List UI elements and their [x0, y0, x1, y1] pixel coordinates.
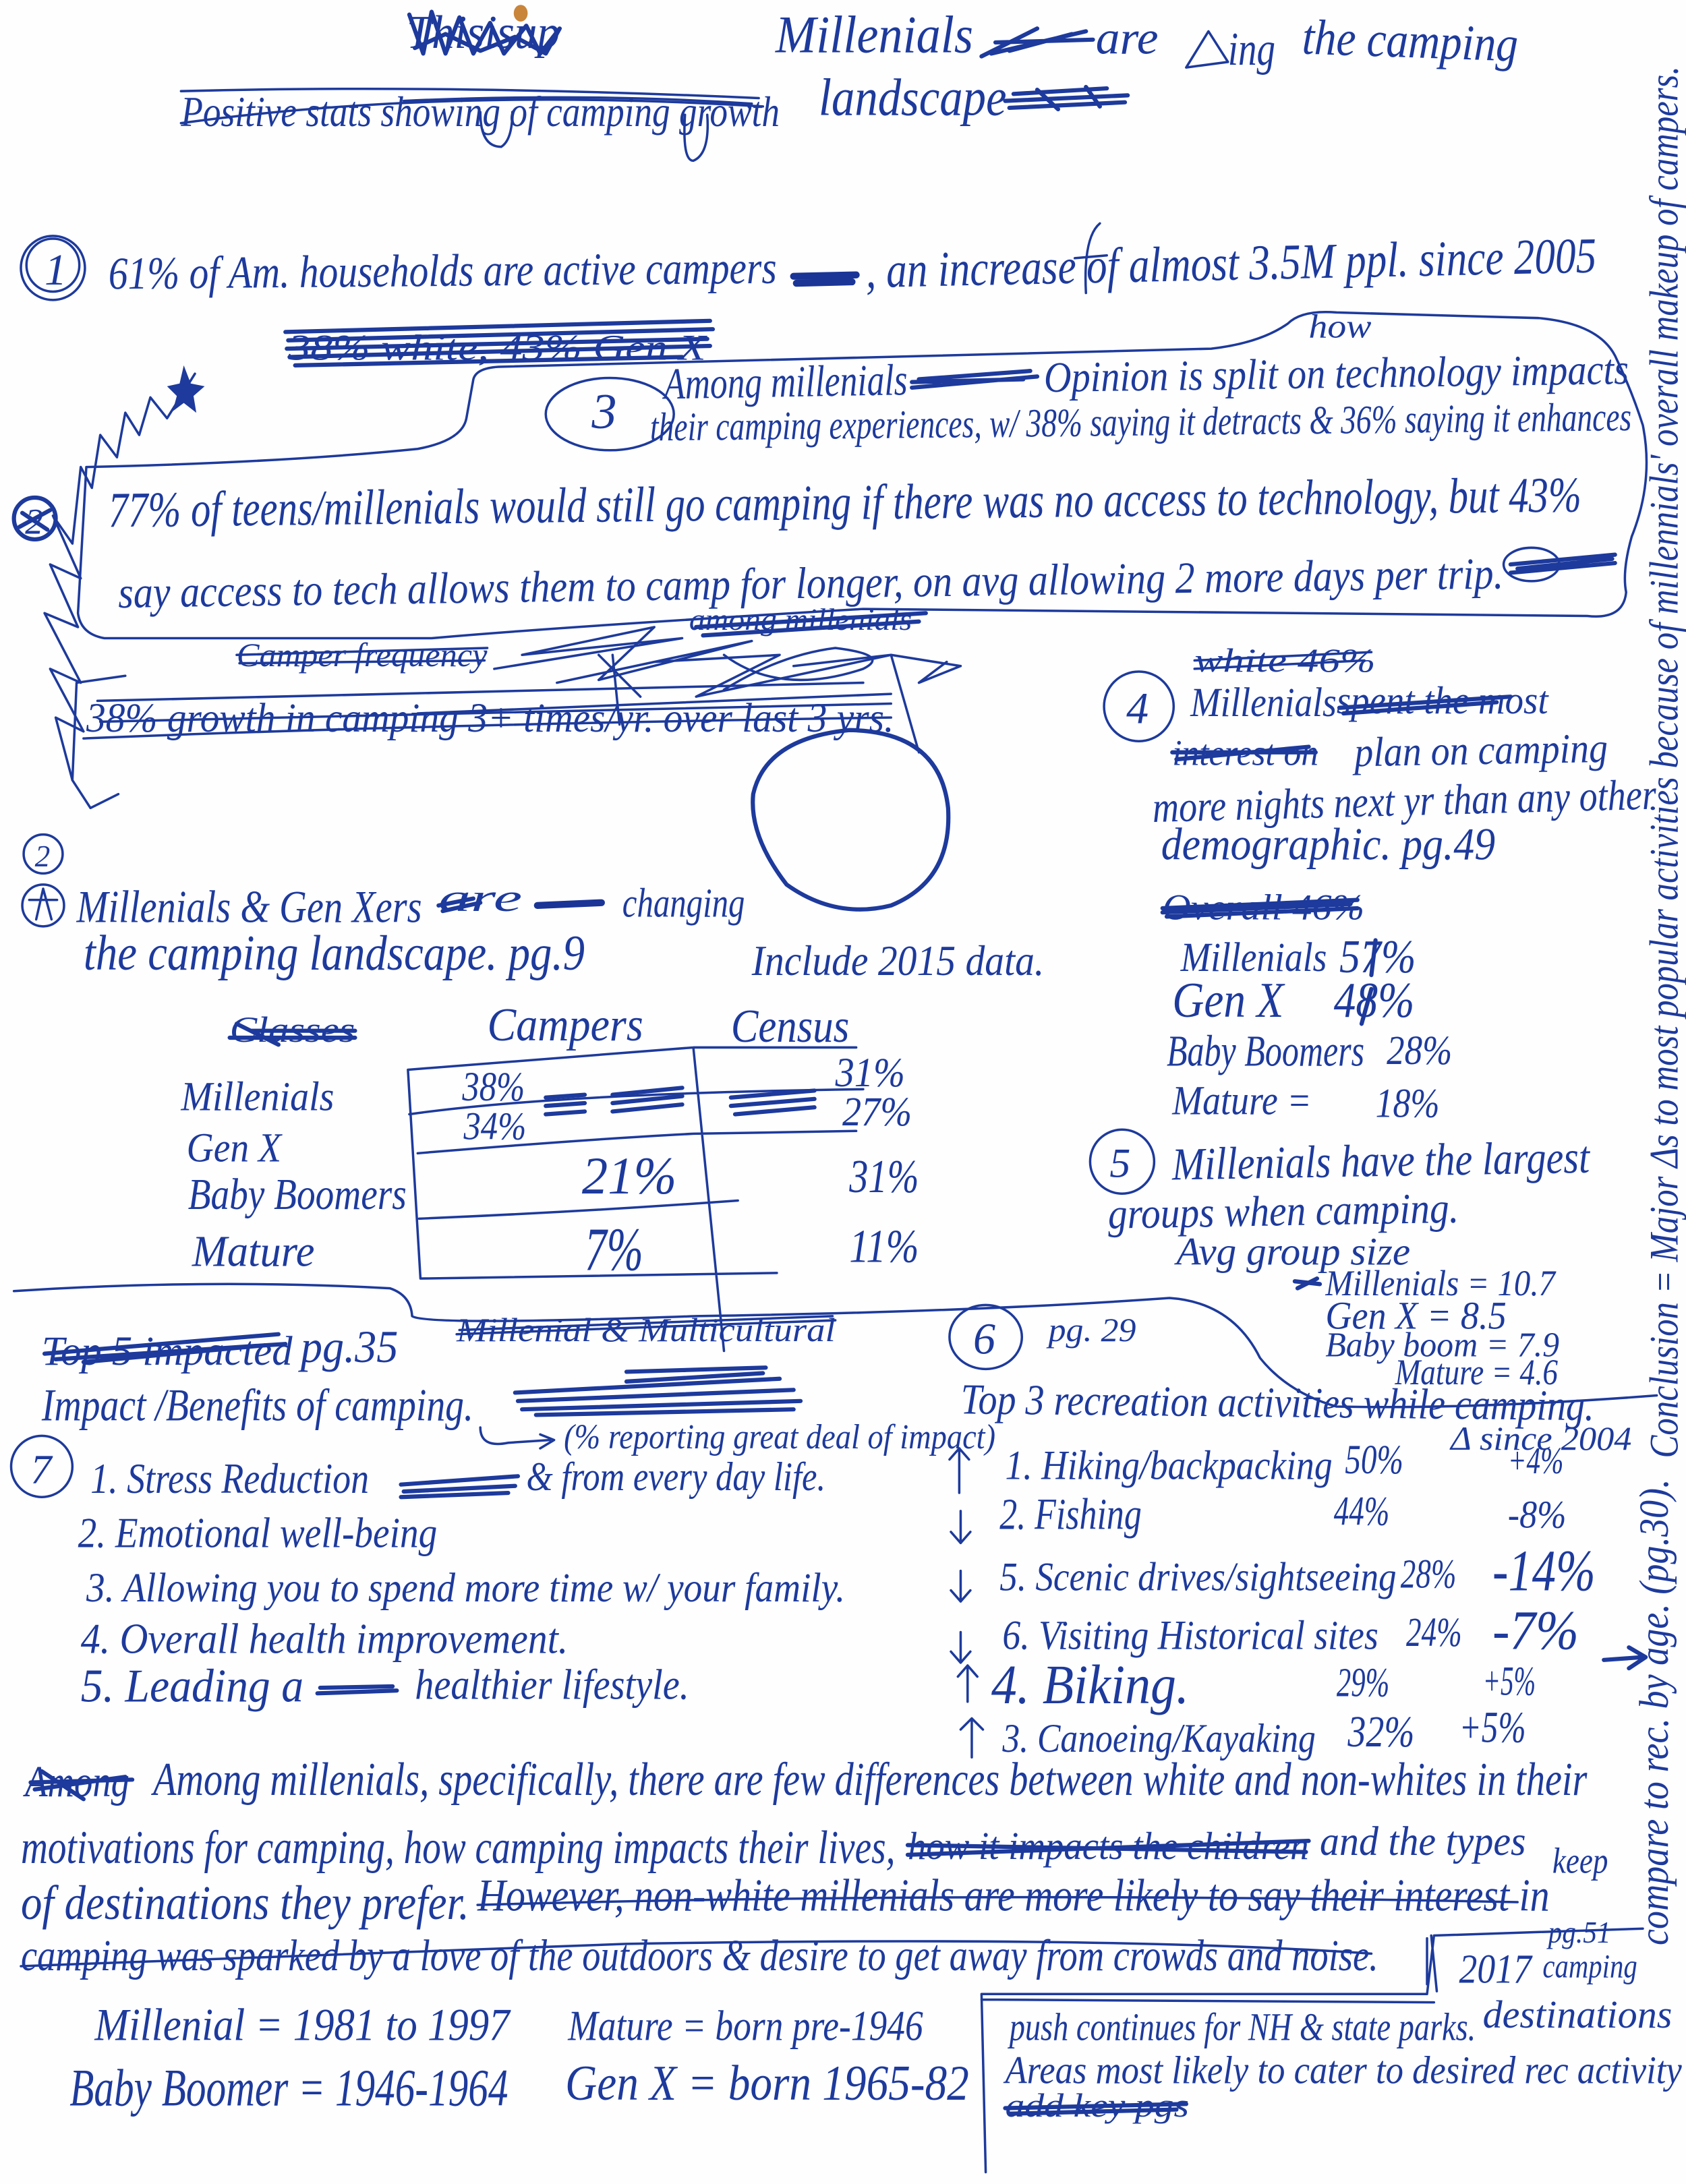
paragraph about millenials: Among — [23, 1757, 129, 1806]
scribbled section: camper frequency: 38% growth in camping 3+ times/yr. over last 3 yrs. — [86, 695, 894, 741]
coffee stain — [514, 5, 527, 22]
point 4: Millenials — [1190, 680, 1337, 726]
section heading: millenials and gen x: changing — [622, 880, 745, 926]
impact heading: Top 5 impacted — [42, 1328, 293, 1374]
table row labels: Millenials — [180, 1073, 334, 1119]
point 4: interest on — [1172, 732, 1318, 773]
paragraph about millenials — [21, 1753, 1608, 1980]
callout: 2017 camping destinations: destinations — [1483, 1993, 1672, 2036]
point 3 text — [650, 308, 1632, 449]
struck-out subtitle: Positive stats showing of camping growth — [181, 88, 780, 136]
point 5 — [1090, 1129, 1591, 1392]
recreation activities list: 6. Visiting Historical sites — [1002, 1612, 1378, 1658]
recreation activities list: 28% — [1401, 1551, 1456, 1597]
generation definitions: Millenial = 1981 to 1997 — [94, 1999, 511, 2050]
paragraph about millenials: motivations for camping, how camping impacts their lives, — [21, 1821, 895, 1874]
struck-out multicultural heading: Millenial & Multicultural — [456, 1311, 836, 1349]
paragraph about millenials: camping was sparked by a love of the outdoors & desire to get away from crowds and noise. — [21, 1931, 1378, 1980]
table values: 38% — [462, 1064, 525, 1110]
point 7: impact list: 3. Allowing you to spend more time w/ your family. — [86, 1565, 845, 1611]
scribbled-out line: 38% white, 43% Gen X — [287, 328, 707, 368]
struck-out subtitle — [181, 88, 780, 160]
title: the camping — [1302, 9, 1519, 73]
section heading: millenials and gen x: are — [438, 876, 522, 920]
stats: planning more nights: Millenials — [1180, 935, 1327, 980]
title: Millenials — [775, 5, 973, 63]
point 5: Millenials = 10.7 — [1325, 1263, 1557, 1303]
recreation activities list: Δ since 2004 — [1449, 1420, 1631, 1457]
scribbled section: camper frequency: among millenials — [689, 603, 912, 637]
scribbled-out line — [285, 321, 713, 368]
stats: planning more nights: Baby Boomers — [1167, 1026, 1364, 1075]
table headings — [230, 999, 849, 1053]
point 7: impact list: 4. Overall health improvement. — [81, 1614, 568, 1662]
table values: 27% — [842, 1089, 912, 1135]
recreation activities list: +5% — [1459, 1703, 1526, 1752]
section heading: millenials and gen x: Millenials & Gen Xers — [76, 881, 422, 933]
point 5: Millenials have the largest — [1171, 1131, 1591, 1190]
recreation activities list — [950, 1420, 1631, 1761]
point 5: Avg group size — [1173, 1229, 1410, 1273]
stats: planning more nights: Overall 46% — [1163, 887, 1364, 928]
stats: planning more nights: 57% — [1339, 931, 1416, 983]
point 4 — [1104, 642, 1658, 870]
table values: 7% — [585, 1216, 643, 1284]
zigzag border with star: 2 — [25, 502, 43, 542]
stats: planning more nights: 18% — [1376, 1081, 1440, 1127]
callout: 2017 camping destinations: push continues for NH & state parks. — [1007, 2005, 1476, 2048]
callout: 2017 camping destinations: 2017 — [1459, 1947, 1533, 1993]
scribbled-out top word: Thisisup — [407, 6, 560, 59]
section heading: millenials and gen x: the camping landscape. pg.9 — [84, 926, 585, 981]
table values — [462, 1050, 919, 1284]
arrow to margin note — [1604, 1647, 1646, 1668]
callout: 2017 camping destinations: add key pgs — [1006, 2087, 1189, 2124]
zigzag border with star — [14, 365, 204, 780]
point 1: 1 — [45, 245, 67, 295]
recreation activities list: 5. Scenic drives/sightseeing — [999, 1555, 1397, 1599]
table values: 21% — [582, 1146, 676, 1205]
section heading: millenials and gen x — [22, 835, 1044, 984]
point 3 text: how — [1309, 308, 1371, 345]
recreation activities list: 1. Hiking/backpacking — [1006, 1442, 1333, 1488]
impact heading: pg.35 — [298, 1321, 398, 1372]
recreation activities list: +4% — [1508, 1440, 1563, 1482]
divider line — [14, 1284, 1657, 1407]
recreation activities list: 29% — [1337, 1659, 1389, 1705]
callout: 2017 camping destinations — [981, 1916, 1682, 2172]
point 3 badge — [546, 378, 674, 450]
section heading: millenials and gen x: Include 2015 data. — [751, 937, 1044, 984]
generation definitions: Gen X = born 1965-82 — [565, 2056, 969, 2111]
recreation activities list: -8% — [1508, 1493, 1566, 1537]
recreation activities list: 44% — [1334, 1489, 1389, 1535]
stats: planning more nights: Gen X — [1172, 973, 1285, 1028]
scribbled section: camper frequency — [72, 603, 960, 808]
table row labels — [180, 1073, 407, 1276]
title: are — [1096, 11, 1159, 64]
table headings: Classes — [230, 1009, 355, 1050]
recreation activities list: 2. Fishing — [999, 1490, 1142, 1539]
table values: 34% — [463, 1104, 526, 1148]
table values: 11% — [849, 1220, 919, 1272]
table values: 31% — [848, 1150, 919, 1203]
table row labels: Mature — [192, 1227, 315, 1276]
paragraph about millenials: how it impacts the children — [908, 1824, 1309, 1868]
point 3 text: Among millenials — [662, 355, 908, 409]
point 2 text — [108, 467, 1615, 618]
empty circle sketch — [753, 730, 948, 910]
point 7: impact list: 7 — [30, 1447, 53, 1493]
table values: 31% — [835, 1050, 905, 1096]
callout: 2017 camping destinations: camping — [1542, 1947, 1637, 1984]
stats: planning more nights: 28% — [1387, 1028, 1452, 1073]
impact heading: Impact /Benefits of camping. — [41, 1380, 473, 1431]
title — [775, 5, 1519, 126]
point 6 badge and heading: 6 — [973, 1315, 995, 1364]
outlined box: technology — [78, 308, 1647, 639]
point 6 badge and heading: Top 3 recreation activities while camping. — [960, 1375, 1594, 1429]
paragraph about millenials: and the types — [1320, 1819, 1526, 1864]
vertical margin note — [1631, 66, 1686, 1945]
point 2 text: say access to tech allows them to camp for longer, on avg allowing 2 more days per trip. — [118, 549, 1504, 618]
point 5: Baby boom = 7.9 — [1325, 1326, 1559, 1365]
table headings: Campers — [488, 999, 643, 1051]
point 7: impact list: 1. Stress Reduction — [90, 1454, 369, 1502]
point 1 — [21, 223, 1597, 300]
paragraph about millenials: of destinations they prefer. — [21, 1876, 469, 1930]
recreation activities list: -14% — [1492, 1539, 1596, 1603]
point 5: Mature = 4.6 — [1395, 1352, 1558, 1392]
table headings: Census — [731, 1000, 849, 1053]
table row labels: Baby Boomers — [188, 1170, 407, 1219]
recreation activities list: +5% — [1483, 1658, 1536, 1704]
table: campers vs census — [180, 999, 919, 1351]
point 1: 61% of Am. households are active campers — [108, 242, 777, 299]
vertical margin note: compare to rec. by age. (pg.30). — [1631, 1479, 1677, 1945]
title: ing — [1228, 23, 1275, 76]
point 3 badge: 3 — [591, 384, 617, 440]
point 4: 4 — [1126, 684, 1149, 733]
callout: 2017 camping destinations: pg.51 — [1546, 1916, 1611, 1949]
point 7: impact list — [11, 1436, 845, 1713]
generation definitions — [69, 1999, 969, 2117]
point 4: spent the most — [1337, 678, 1549, 722]
impact heading — [41, 1321, 995, 1456]
point 4: plan on camping — [1351, 726, 1608, 775]
point 7: impact list: 5. Leading a — [81, 1660, 303, 1713]
scribbled section: camper frequency: Camper frequency — [237, 637, 488, 674]
point 4: white 46% — [1194, 642, 1376, 679]
section heading: millenials and gen x: 2 — [35, 839, 50, 873]
point 6 badge and heading: pg. 29 — [1046, 1311, 1136, 1349]
point 6 badge and heading — [950, 1305, 1594, 1429]
recreation activities list: 4. Biking. — [991, 1653, 1189, 1715]
generation definitions: Baby Boomer = 1946-1964 — [69, 2058, 508, 2117]
recreation activities list: -7% — [1492, 1599, 1579, 1661]
point 4: demographic. pg.49 — [1161, 819, 1495, 870]
recreation activities list: 32% — [1347, 1707, 1414, 1757]
table row labels: Gen X — [187, 1125, 283, 1171]
recreation activities list: 50% — [1345, 1437, 1403, 1483]
impact heading: (% reporting great deal of impact) — [564, 1418, 995, 1456]
stats: planning more nights: Mature = — [1171, 1078, 1312, 1124]
point 7: impact list: & from every day life. — [526, 1454, 825, 1499]
point 5: Gen X = 8.5 — [1325, 1293, 1507, 1337]
generation definitions: Mature = born pre-1946 — [567, 2001, 923, 2049]
point 7: impact list: 2. Emotional well-being — [78, 1509, 437, 1557]
recreation activities list: 3. Canoeing/Kayaking — [1002, 1716, 1316, 1761]
table grid — [408, 1047, 863, 1351]
stats: planning more nights — [1163, 887, 1452, 1127]
paragraph about millenials: keep — [1552, 1841, 1608, 1881]
stats: planning more nights: 48% — [1334, 973, 1414, 1028]
recreation activities list: 24% — [1406, 1610, 1462, 1655]
title: landscape — [819, 67, 1007, 126]
point 5: groups when camping. — [1107, 1184, 1459, 1238]
point 7: impact list: healthier lifestyle. — [415, 1661, 689, 1709]
point 5: 5 — [1109, 1140, 1130, 1186]
